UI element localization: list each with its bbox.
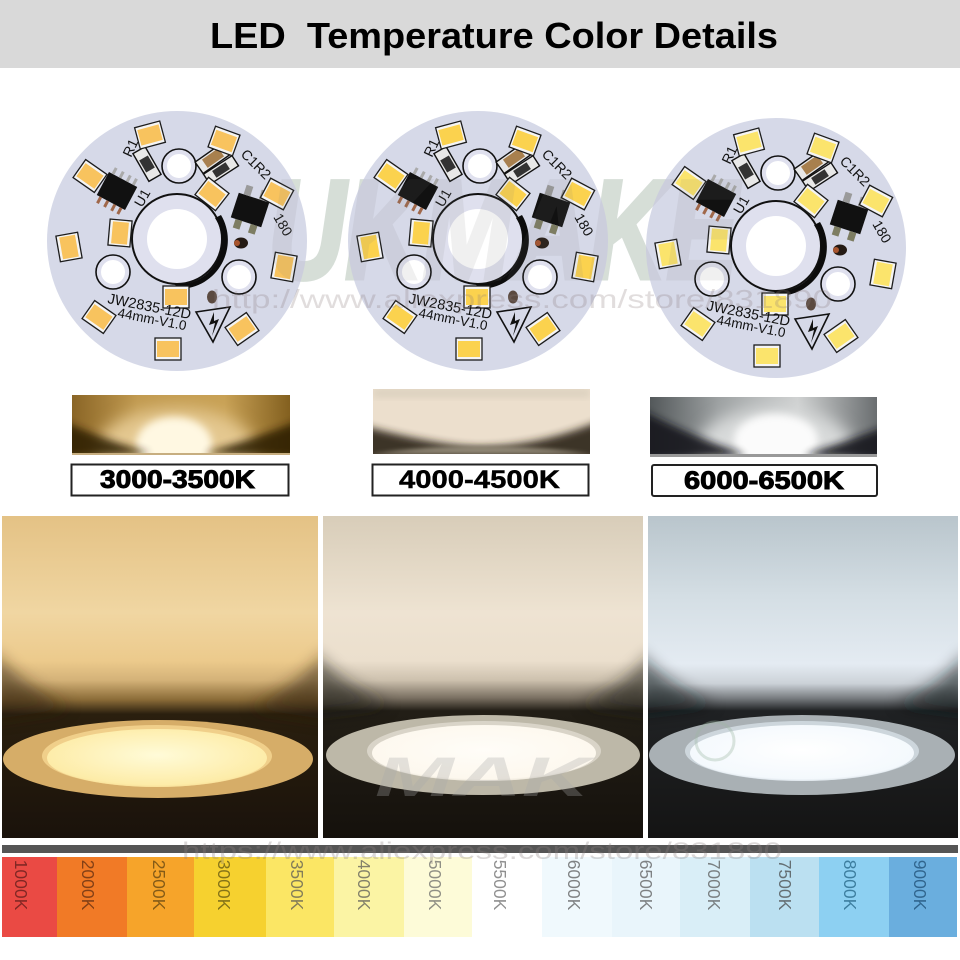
label: 3000-3500K: [72, 464, 288, 496]
LED board: warm white: C1R2: [238, 146, 275, 183]
LED board: cool white: C1R2: [837, 153, 874, 190]
colour temperature scale: 6500K: [636, 860, 656, 911]
label: 3000-3500K: 3000-3500K: [100, 466, 255, 494]
colour temperature scale: 6000K: [564, 860, 584, 911]
watermark: brand over boards: UKMAKE: [268, 151, 741, 308]
label: 4000-4500K: 4000-4500K: [399, 466, 560, 494]
LED board: warm white: 44mm-V1.0: [116, 305, 188, 333]
swatch: neutral: [373, 389, 590, 454]
dark strip: [2, 845, 958, 853]
swatch: warm: [72, 395, 290, 455]
photo panel: neutral downlight: [310, 516, 655, 838]
LED board: neutral white: R1: [420, 136, 442, 159]
label: 6000-6500K: 6000-6500K: [684, 467, 844, 495]
colour temperature scale: [2, 857, 957, 937]
LED board: neutral white: 44mm-V1.0: [417, 305, 489, 333]
watermark: brand behind boards: UKMAKE: [268, 151, 741, 308]
LED board: cool white: [646, 118, 906, 378]
title band: [0, 0, 960, 68]
watermark: store url: http://www.aliexpress.com/store/831890: [212, 284, 832, 314]
LED board: neutral white: JW2835-12D: [407, 291, 493, 323]
LED board: neutral white: [348, 111, 608, 371]
LED board: warm white: R1: [119, 136, 141, 159]
LED board: neutral white: 180: [571, 210, 597, 239]
LED board: cool white: R1: [718, 143, 740, 166]
colour temperature scale: 9000K: [910, 860, 930, 911]
watermark: bottom store url: https://www.aliexpress.com/store/831890: [182, 838, 782, 865]
colour temperature scale: 8000K: [840, 860, 860, 911]
colour temperature scale: 2000K: [78, 860, 98, 911]
LED board: warm white: [47, 111, 307, 371]
LED board: warm white: U1: [131, 186, 154, 210]
LED board: warm white: 180: [270, 210, 296, 239]
title band: LED Temperature Color Details: [210, 15, 778, 56]
LED board: cool white: 44mm-V1.0: [715, 312, 787, 340]
colour temperature scale: 3000K: [214, 860, 234, 911]
swatch: cool: [650, 397, 877, 457]
colour temperature scale: 5500K: [490, 860, 510, 911]
colour temperature scale: 2500K: [149, 860, 169, 911]
colour temperature scale: 5000K: [425, 860, 445, 911]
LED board: neutral white: C1R2: [539, 146, 576, 183]
LED board: neutral white: U1: [432, 186, 455, 210]
colour temperature scale: 7500K: [775, 860, 795, 911]
colour temperature scale: 1000K: [11, 860, 31, 911]
photo panel: cool downlight: [635, 516, 960, 838]
photo panel: warm downlight: [0, 516, 330, 838]
colour temperature scale: 3500K: [287, 860, 307, 911]
LED board: cool white: JW2835-12D: [705, 298, 791, 330]
LED board: cool white: U1: [730, 193, 753, 216]
LED board: warm white: JW2835-12D: [106, 291, 192, 323]
colour temperature scale: 4000K: [354, 860, 374, 911]
photo panel: neutral downlight: MAK: [375, 745, 596, 808]
label: 6000-6500K: [652, 465, 877, 496]
label: 4000-4500K: [372, 464, 588, 496]
colour temperature scale: 7000K: [704, 860, 724, 911]
LED board: cool white: 180: [869, 218, 895, 246]
